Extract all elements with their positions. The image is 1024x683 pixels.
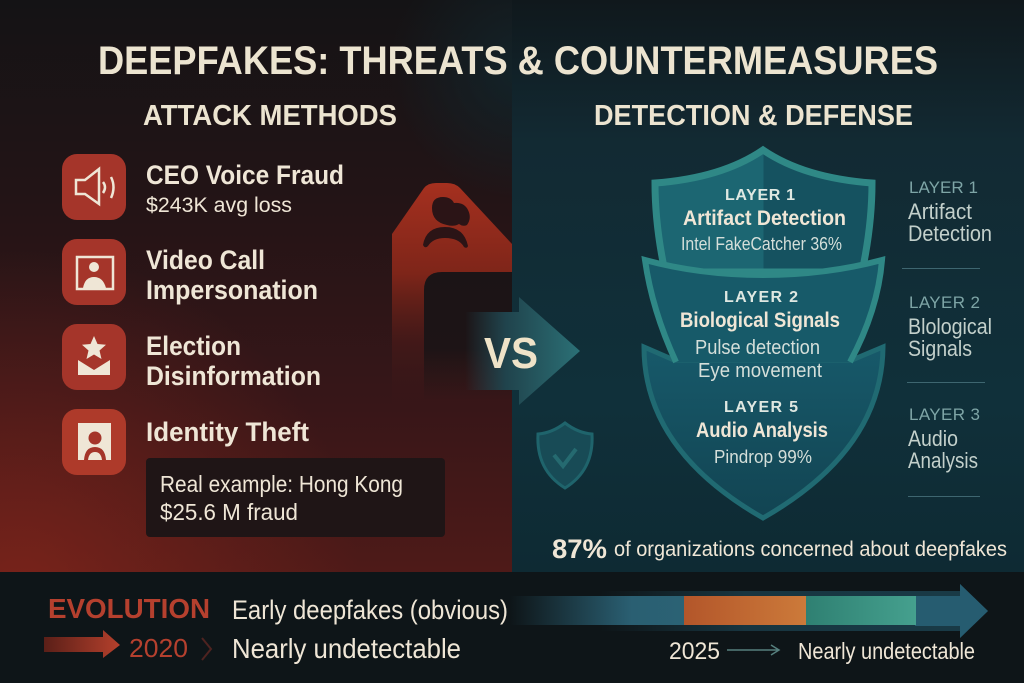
side label: layer 2: LAYER 2 — [909, 293, 980, 312]
side label: layer 1: Artifact — [908, 199, 972, 224]
item: video call impersonation: Video Call — [146, 245, 265, 275]
icon: small shield — [538, 423, 592, 488]
shield layer 2 text: Eye movement — [698, 360, 822, 382]
year 2020: 2020 — [129, 633, 188, 663]
side label: layer 3: Analysis — [908, 448, 978, 473]
callout: real example: Real example: Hong Kong — [160, 471, 403, 497]
item: election disinformation: Disinformation — [146, 361, 321, 391]
shield layer 1 text: LAYER 1 — [725, 187, 795, 204]
icon: ballot star — [62, 324, 126, 390]
text: nearly undetectable 2025: Nearly undetectable — [798, 638, 975, 664]
side label: layer 2: Blological — [908, 314, 992, 339]
item: identity theft: Identity Theft — [146, 417, 309, 447]
text: nearly undetectable: Nearly undetectable — [232, 633, 461, 664]
shield layer 1 text — [681, 187, 846, 254]
arrow: red — [44, 630, 120, 658]
side label: layer 1 — [908, 178, 992, 246]
side label: layer 1: Detection — [908, 221, 992, 246]
icon: red masked figure tag — [392, 183, 512, 410]
side label: layer 2: Signals — [908, 336, 972, 361]
item: election disinformation — [146, 331, 321, 391]
shield layer 5 text: Audio Analysis — [696, 419, 828, 442]
left panel background — [0, 0, 512, 572]
item: CEO voice fraud: $243K avg loss — [146, 194, 292, 217]
label: evolution: EVOLUTION — [48, 593, 210, 624]
shield layer 5 text: Pindrop 99% — [714, 447, 812, 467]
item: CEO voice fraud: CEO Voice Fraud — [146, 160, 344, 190]
item: CEO voice fraud — [146, 160, 344, 217]
side label: layer 3: LAYER 3 — [909, 405, 980, 424]
heading: detection and defense: DETECTION & DEFENSE — [594, 100, 913, 132]
statistic: 87 percent — [552, 534, 1007, 564]
heading: attack methods: ATTACK METHODS — [143, 100, 397, 132]
title: DEEPFAKES: THREATS & COUNTERMEASURES — [98, 39, 938, 83]
right panel background — [512, 0, 1024, 572]
side label: layer 1: LAYER 1 — [909, 178, 978, 197]
item: election disinformation: Election — [146, 331, 241, 361]
shield layer 1 — [655, 150, 872, 272]
side label: layer 3: Audio — [908, 426, 958, 451]
arrow: VS — [465, 297, 580, 405]
bottom band: evolution timeline — [0, 572, 1024, 683]
statistic: 87 percent: 87% — [552, 534, 607, 564]
shield layer 3 — [644, 347, 883, 518]
side label: layer 2 — [908, 293, 992, 361]
callout: real example: $25.6 M fraud — [160, 499, 298, 525]
shield layer 2 text: Biological Signals — [680, 309, 840, 332]
shield layer 2 text: LAYER 2 — [724, 289, 798, 306]
arrow: VS: VS — [484, 329, 538, 378]
text: early deepfakes: Early deepfakes (obvious) — [232, 595, 508, 625]
shield layer 5 text: LAYER 5 — [724, 399, 798, 416]
item: video call impersonation: Impersonation — [146, 275, 318, 305]
shield layer 2 text: Pulse detection — [695, 337, 820, 359]
icon: identity card — [62, 409, 126, 475]
shield layer 2 — [645, 260, 882, 362]
icon: video portrait — [62, 239, 126, 305]
shield layer 2 text — [680, 289, 840, 382]
callout: real example — [146, 458, 445, 537]
arrow: thin — [727, 645, 779, 655]
shield layer 1 text: Artifact Detection — [683, 207, 846, 230]
icon: speaker — [62, 154, 126, 220]
shield layer 1 text: Intel FakeCatcher 36% — [681, 234, 842, 254]
progress arrow bar — [510, 584, 988, 638]
year 2025: 2025 — [669, 638, 720, 665]
shield layer 5 text — [696, 399, 828, 467]
big layered shield — [644, 150, 883, 518]
item: video call impersonation — [146, 245, 318, 305]
side label: layer 3 — [908, 405, 980, 473]
statistic: 87 percent: of organizations concerned about deepfakes — [614, 538, 1007, 561]
